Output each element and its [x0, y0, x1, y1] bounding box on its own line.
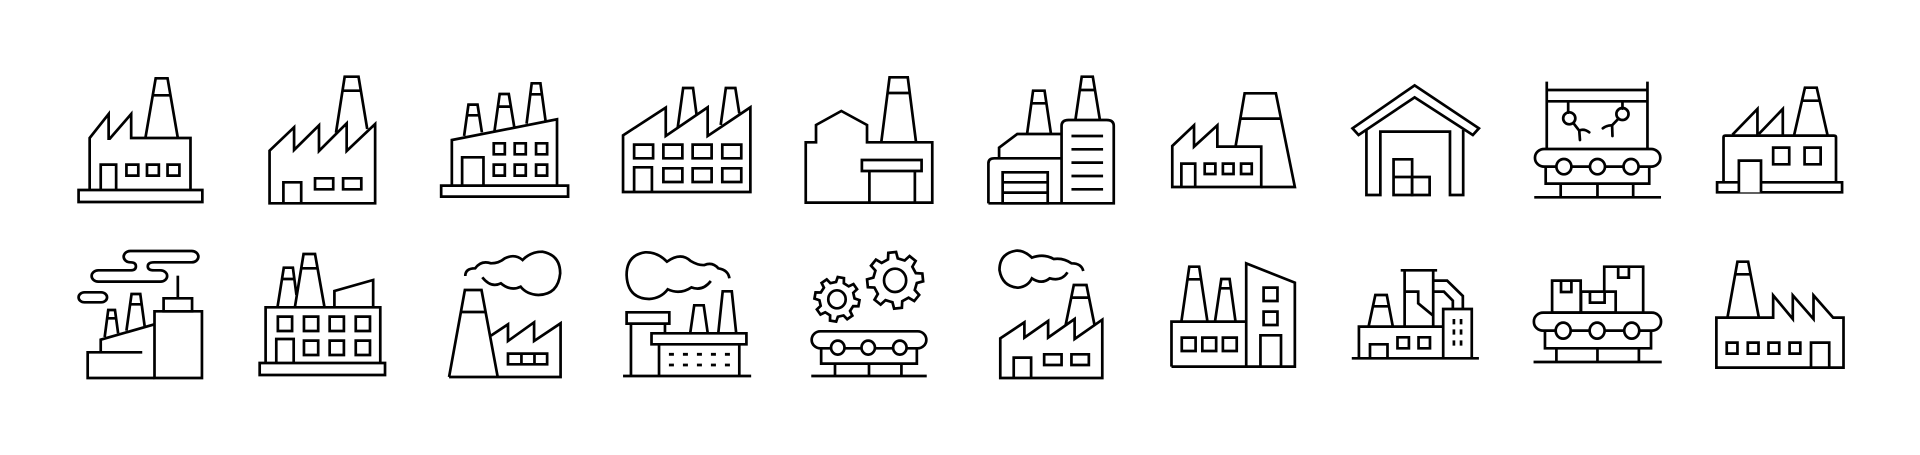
icon: long factory with chimney and roof teeth: [1716, 262, 1844, 368]
icon: factory with sloped roof and three chimneys: [441, 83, 568, 197]
icon: factory with awning, vents and cloud: [623, 252, 751, 376]
icon: industrial plant with pipes: [1352, 270, 1479, 358]
icon: gabled factory with loading door: [806, 77, 932, 203]
icon: factory with base and two roof teeth: [79, 78, 202, 202]
icon: sawtooth factory with window grid: [623, 88, 750, 192]
icon: warehouse with boxes: [1352, 85, 1479, 195]
icon: robotic arms over conveyor: [1534, 82, 1661, 197]
icon: factory with tower and garage door: [988, 77, 1114, 203]
icon: factory with two chimneys and window grid: [260, 254, 385, 375]
icon: factory complex with smoke clouds: [79, 251, 202, 378]
icon: gears over conveyor: [811, 250, 927, 376]
icon: factory with slanted tower: [1171, 263, 1295, 367]
icon: cooling tower with cloud and sawtooth factory: [449, 252, 561, 377]
icon: sawtooth factory with chimney and cloud: [999, 251, 1102, 378]
icon: factory with triangular roof and base: [1717, 88, 1842, 192]
icon: boxes on conveyor: [1534, 267, 1662, 362]
icon: factory with cooling tower: [1172, 93, 1295, 187]
icon: sawtooth factory with chimney: [270, 77, 375, 203]
